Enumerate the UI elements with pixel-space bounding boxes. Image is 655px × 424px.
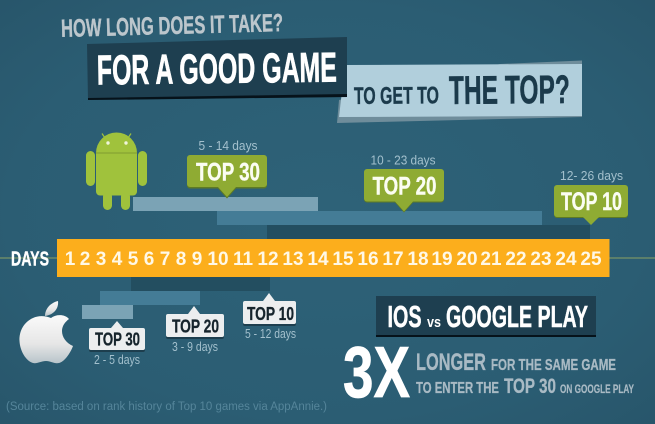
days timeline bar: 10 xyxy=(207,249,229,270)
heading banner: to get to the top: THE TOP? xyxy=(449,68,570,113)
banner: ios vs google play: vs xyxy=(427,314,441,331)
days timeline bar: 3 xyxy=(96,249,106,270)
days timeline bar: 2 xyxy=(80,249,90,270)
days timeline bar: 18 xyxy=(407,249,429,270)
days timeline bar: 14 xyxy=(307,249,329,270)
days timeline bar: 16 xyxy=(357,249,379,270)
ios label: top 10: 5 - 12 days xyxy=(245,327,296,341)
days timeline bar: 13 xyxy=(282,249,304,270)
callout: 3x longer xyxy=(343,333,634,413)
android label: top 20: TOP 20 xyxy=(372,172,436,200)
callout: 3x longer: TOP 30 xyxy=(504,375,556,398)
days timeline bar: 12 xyxy=(257,249,279,270)
heading banner: to get to the top xyxy=(337,60,582,123)
timeline axis line xyxy=(0,257,655,259)
ios range bars xyxy=(82,277,270,319)
heading banner: to get to the top: TO GET TO xyxy=(354,82,439,110)
ios label: top 10 xyxy=(243,293,296,341)
ios label: top 20: 3 - 9 days xyxy=(172,340,218,354)
android label: top 10 xyxy=(554,168,628,225)
android label: top 30: TOP 30 xyxy=(196,158,260,186)
callout: 3x longer: TO ENTER THE xyxy=(416,380,499,397)
heading: how long does it take: HOW LONG DOES IT TAKE? xyxy=(61,9,283,43)
ios label: top 20: TOP 20 xyxy=(172,316,219,336)
days timeline bar: 1 xyxy=(65,249,76,270)
days timeline bar: 17 xyxy=(382,249,404,270)
heading banner: for a good game: FOR A GOOD GAME xyxy=(97,44,337,93)
ios label: top 30 xyxy=(89,321,145,367)
android label: top 10: TOP 10 xyxy=(561,188,622,216)
days timeline bar: 20 xyxy=(456,249,478,270)
days timeline bar: 21 xyxy=(480,249,502,270)
android label: top 30 xyxy=(187,138,267,198)
ios label: top 10: TOP 10 xyxy=(247,303,294,324)
days label: DAYS xyxy=(11,248,49,270)
days timeline bar: 5 xyxy=(128,249,139,270)
heading banner: for a good game xyxy=(87,37,347,100)
days timeline bar: 7 xyxy=(160,249,170,270)
callout: 3x longer: LONGER xyxy=(416,349,486,376)
days timeline bar: 19 xyxy=(431,249,453,270)
source note: (Source: based on rank history of Top 10 games via AppAnnie.) xyxy=(6,401,327,413)
days timeline bar: 9 xyxy=(192,249,202,270)
days timeline bar: 23 xyxy=(530,249,552,270)
icon: apple xyxy=(19,301,73,363)
android label: top 30: 5 - 14 days xyxy=(198,138,258,153)
days timeline bar: 6 xyxy=(144,249,154,270)
ios label: top 30: TOP 30 xyxy=(95,328,140,350)
android label: top 20 xyxy=(364,152,444,212)
days timeline bar: 22 xyxy=(505,249,527,270)
banner: ios vs google play xyxy=(376,296,596,337)
days timeline bar: 15 xyxy=(332,249,354,270)
days timeline bar: 8 xyxy=(176,249,186,270)
days timeline bar xyxy=(57,239,610,277)
android range bars xyxy=(133,197,590,239)
days timeline bar: 4 xyxy=(112,249,123,270)
days timeline bar: 25 xyxy=(580,249,602,270)
banner: ios vs google play: IOS xyxy=(388,300,422,334)
icon: android xyxy=(86,132,147,210)
android label: top 20: 10 - 23 days xyxy=(370,152,436,168)
ios label: top 30: 2 - 5 days xyxy=(94,353,140,367)
ios label: top 20 xyxy=(166,306,224,354)
days timeline bar: 24 xyxy=(555,249,577,270)
callout: 3x longer: 3X xyxy=(343,333,410,413)
days timeline bar: 11 xyxy=(233,249,253,270)
android label: top 10: 12- 26 days xyxy=(560,168,623,183)
